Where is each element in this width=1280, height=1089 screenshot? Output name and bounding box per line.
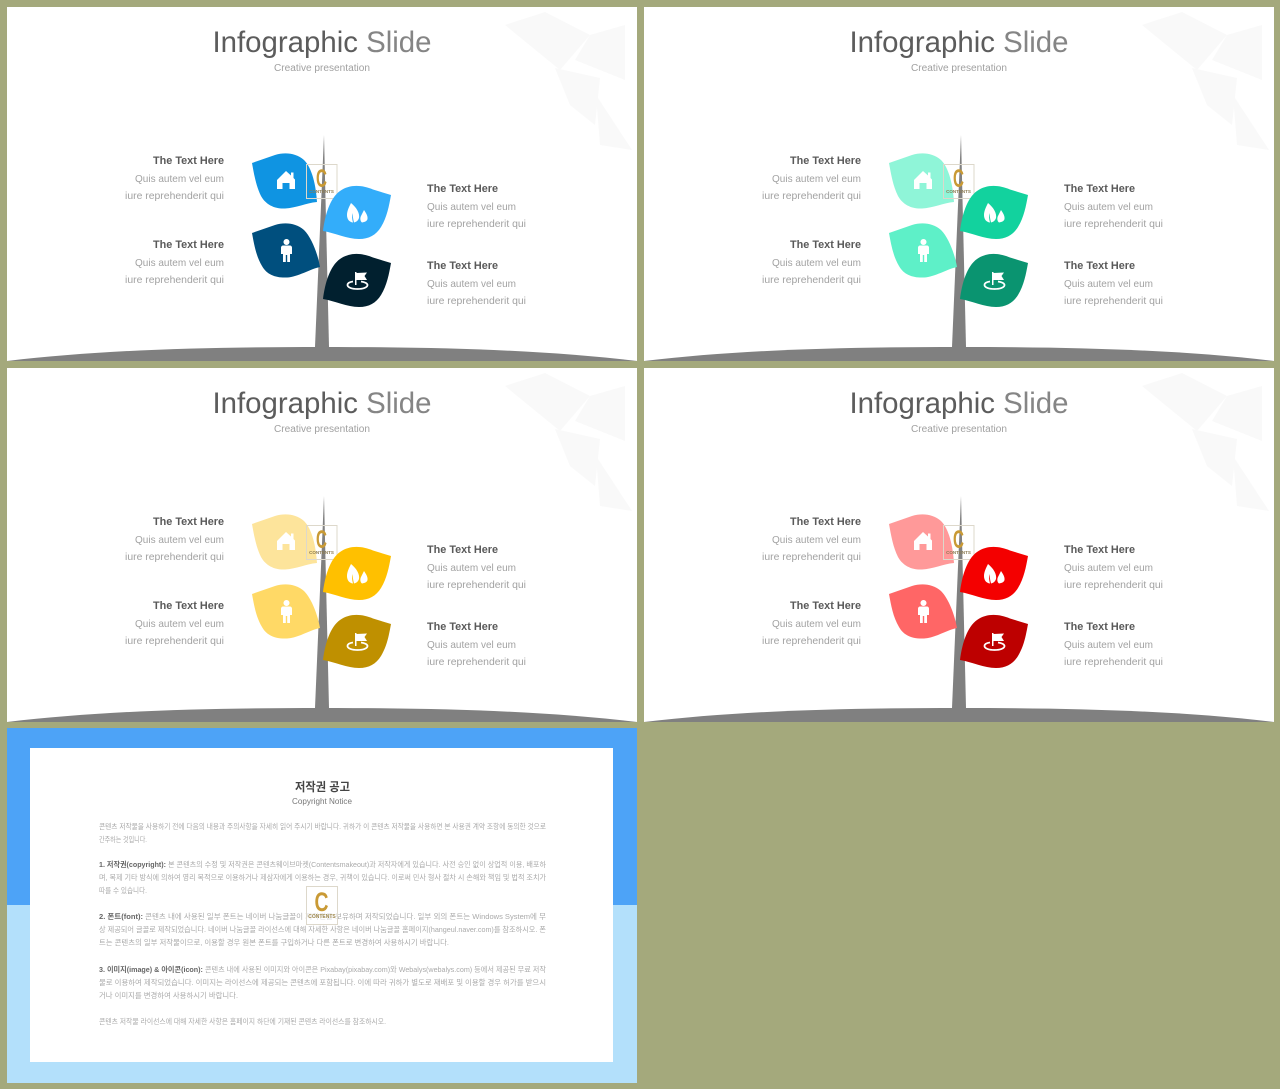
watermark logo xyxy=(944,164,974,198)
notice section 3: images and icons: 물로 이용하여 제작되었습니다. 이미지는 라이선스에 제공되는 콘텐츠에 포함됩니다. 이에 따라 귀하가 별도로 재배포 및 이용할 경우 허가를 받으시 xyxy=(99,978,546,987)
text block: bottom right xyxy=(427,260,526,307)
leaf: home xyxy=(252,153,317,209)
text block: bottom left: The Text Here xyxy=(153,239,224,251)
text block: bottom right: Quis autem vel eum xyxy=(1064,639,1153,651)
text block: top right xyxy=(427,183,526,230)
leaf: plant xyxy=(960,186,1028,239)
notice section 3: images and icons: 거나 이미지를 변경하여 사용하시기 바랍니다. xyxy=(99,991,238,1000)
background facets xyxy=(1142,12,1269,150)
notice heading: 저작권 공고 xyxy=(295,779,350,794)
tree trunk xyxy=(952,135,966,347)
text block: bottom left: iure reprehenderit qui xyxy=(762,274,861,286)
text block: bottom right: iure reprehenderit qui xyxy=(1064,656,1163,668)
tree trunk xyxy=(315,135,329,347)
notice intro xyxy=(99,822,546,844)
slide 2: green tree infographic xyxy=(644,7,1274,361)
text block: top left xyxy=(762,155,861,202)
leaf: flag xyxy=(323,615,391,668)
notice section 1: copyright: 며, 복제 기타 방식에 의하여 영리 목적으로 이용하거나 제삼자에게 이용하는 경우, 귀책이 있습니다. 이로써 민사 형사 절차 시 손해와 책임 및 법적 조치가 xyxy=(99,873,546,882)
text block: bottom right xyxy=(427,621,526,668)
ground xyxy=(7,347,637,361)
ground xyxy=(644,347,1274,361)
text block: top left: iure reprehenderit qui xyxy=(762,551,861,563)
text block: bottom left: Quis autem vel eum xyxy=(135,257,224,269)
text block: top left xyxy=(125,155,224,202)
ground xyxy=(7,708,637,722)
subtitle: Creative presentation xyxy=(911,424,1007,435)
text block: top right: iure reprehenderit qui xyxy=(1064,579,1163,591)
text block: bottom right: The Text Here xyxy=(1064,621,1135,633)
leaf: flag xyxy=(960,615,1028,668)
watermark logo: CONTENTS xyxy=(308,914,336,920)
text block: top left xyxy=(762,516,861,563)
text block: top left: Quis autem vel eum xyxy=(772,173,861,185)
text block: bottom right xyxy=(1064,260,1163,307)
notice closing line: 콘텐츠 저작물 라이선스에 대해 자세한 사항은 홈페이지 하단에 기재된 콘텐츠 라이선스를 참조하시오. xyxy=(99,1017,386,1026)
ground xyxy=(644,708,1274,722)
text block: top left: Quis autem vel eum xyxy=(135,534,224,546)
tree trunk xyxy=(315,496,329,708)
text block: top left xyxy=(125,516,224,563)
background facets xyxy=(505,12,632,150)
text block: bottom right: iure reprehenderit qui xyxy=(427,295,526,307)
leaf: flag xyxy=(323,254,391,307)
notice section 1: copyright xyxy=(99,860,546,895)
text block: top left: The Text Here xyxy=(790,516,861,528)
text block: top left: The Text Here xyxy=(153,516,224,528)
notice section 2: font: 2. 폰트(font): 콘텐츠 내에 사용된 일부 폰트는 네이버 나눔글꼴이 저작권을 보유하며 저작되었습니다. 일부 외의 폰트는 Windows System에 무 xyxy=(99,912,546,921)
text block: bottom left: iure reprehenderit qui xyxy=(762,635,861,647)
text block: top left: iure reprehenderit qui xyxy=(125,551,224,563)
text block: top right: Quis autem vel eum xyxy=(1064,201,1153,213)
text block: top right xyxy=(427,544,526,591)
subtitle: Creative presentation xyxy=(274,63,370,74)
text block: top right xyxy=(1064,183,1163,230)
text block: bottom left: The Text Here xyxy=(153,600,224,612)
leaf: person xyxy=(252,223,320,278)
text block: bottom right: iure reprehenderit qui xyxy=(1064,295,1163,307)
notice subheading: Copyright Notice xyxy=(292,797,353,806)
text block: top right xyxy=(1064,544,1163,591)
text block: bottom left: Quis autem vel eum xyxy=(772,257,861,269)
text block: top right: iure reprehenderit qui xyxy=(427,579,526,591)
text block: bottom left xyxy=(762,239,861,286)
text block: top right: Quis autem vel eum xyxy=(427,562,516,574)
text block: bottom left: The Text Here xyxy=(790,239,861,251)
text block: bottom left: Quis autem vel eum xyxy=(135,618,224,630)
notice section 3: images and icons xyxy=(99,965,546,1000)
slide 4: red tree infographic xyxy=(644,368,1274,722)
text block: top right: The Text Here xyxy=(427,544,498,556)
notice section 1: copyright: 따를 수 있습니다. xyxy=(99,886,147,895)
leaf: plant xyxy=(960,547,1028,600)
text block: top right: Quis autem vel eum xyxy=(1064,562,1153,574)
text block: bottom left xyxy=(125,600,224,647)
leaf: person xyxy=(889,584,957,639)
notice section 2: font: 트는 콘텐츠의 일부 저작물이므로, 이용할 경우 원본 폰트를 구입하거나 다른 폰트로 변경하여 사용하시기 바랍니다. xyxy=(99,938,449,947)
text block: bottom right: The Text Here xyxy=(1064,260,1135,272)
text block: top left: iure reprehenderit qui xyxy=(125,190,224,202)
watermark logo xyxy=(944,526,974,560)
text block: bottom left: iure reprehenderit qui xyxy=(125,635,224,647)
watermark logo xyxy=(306,886,338,924)
subtitle: Creative presentation xyxy=(274,424,370,435)
notice section 2: font xyxy=(99,912,546,947)
tree trunk xyxy=(952,496,966,708)
watermark logo xyxy=(306,526,337,560)
text block: bottom right: Quis autem vel eum xyxy=(1064,278,1153,290)
leaf: home xyxy=(889,514,954,570)
text block: top left: Quis autem vel eum xyxy=(772,534,861,546)
text block: top right: The Text Here xyxy=(427,183,498,195)
notice intro: 간주하는 것입니다. xyxy=(99,835,147,844)
background facets xyxy=(505,373,632,511)
text block: bottom left: The Text Here xyxy=(790,600,861,612)
notice intro: 콘텐츠 저작물을 사용하기 전에 다음의 내용과 주의사항을 자세히 읽어 주시기 바랍니다. 귀하가 이 콘텐츠 저작물을 사용하면 본 사용권 계약 조항에 동의한 것으로 xyxy=(99,822,546,831)
text block: bottom left xyxy=(762,600,861,647)
subtitle: Creative presentation xyxy=(911,63,1007,74)
leaf: person xyxy=(252,584,320,639)
text block: top left: The Text Here xyxy=(790,155,861,167)
leaf: plant xyxy=(323,547,391,600)
text block: top right: The Text Here xyxy=(1064,183,1135,195)
text block: bottom right: iure reprehenderit qui xyxy=(427,656,526,668)
text block: bottom right xyxy=(1064,621,1163,668)
text block: top right: iure reprehenderit qui xyxy=(427,218,526,230)
text block: bottom right: The Text Here xyxy=(427,621,498,633)
background facets xyxy=(1142,373,1269,511)
title: Infographic Slide xyxy=(850,387,1068,420)
slide 1: blue tree infographic xyxy=(7,7,637,361)
notice section 1: copyright: 1. 저작권(copyright): 본 콘텐츠의 수정 및 저작권은 콘텐츠웨이브마켓(Contentsmakeout)과 저작자에게 있습니다. 사전 승인 없이 상업적 이용, 배포하 xyxy=(99,860,546,869)
slide 3: yellow tree infographic xyxy=(7,368,637,722)
leaf: flag xyxy=(960,254,1028,307)
leaf: home xyxy=(252,514,317,570)
notice section 2: font: 상 제공되어 글꼴로 제작되었습니다. 네이버 나눔글꼴 라이선스에 대해 자세한 사항은 네이버 나눔글꼴 홈페이지(hangeul.naver.com)를 참조하시오. 폰 xyxy=(99,925,546,934)
title: Infographic Slide xyxy=(212,26,432,59)
text block: bottom right: The Text Here xyxy=(427,260,498,272)
watermark logo xyxy=(306,164,337,198)
leaf: person xyxy=(889,223,957,278)
text block: bottom left xyxy=(125,239,224,286)
title: Infographic Slide xyxy=(850,26,1068,59)
watermark logo: C xyxy=(314,887,328,917)
notice section 3: images and icons: 3. 이미지(image) & 아이콘(icon): 콘텐츠 내에 사용된 이미지와 아이콘은 Pixabay(pixabay.com)와 Webalys(webalys.com) 등에서 제공된 무료 저작 xyxy=(99,965,546,974)
text block: bottom right: Quis autem vel eum xyxy=(427,639,516,651)
leaf: home xyxy=(889,153,954,209)
panel: copyright notice xyxy=(7,728,637,1083)
text block: top right: The Text Here xyxy=(1064,544,1135,556)
text block: bottom right: Quis autem vel eum xyxy=(427,278,516,290)
text block: bottom left: Quis autem vel eum xyxy=(772,618,861,630)
text block: top right: iure reprehenderit qui xyxy=(1064,218,1163,230)
text block: top right: Quis autem vel eum xyxy=(427,201,516,213)
text block: top left: Quis autem vel eum xyxy=(135,173,224,185)
leaf: plant xyxy=(323,186,391,239)
text block: top left: The Text Here xyxy=(153,155,224,167)
text block: top left: iure reprehenderit qui xyxy=(762,190,861,202)
title: Infographic Slide xyxy=(212,387,432,420)
text block: bottom left: iure reprehenderit qui xyxy=(125,274,224,286)
